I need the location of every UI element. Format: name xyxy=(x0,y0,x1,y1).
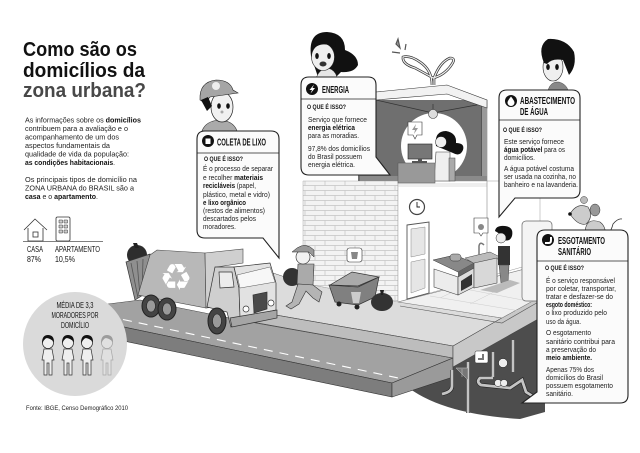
room light circle xyxy=(401,113,467,179)
intro text: qualidade de vida da população: xyxy=(25,152,129,158)
body text: ser usada na cozinha, no xyxy=(504,174,576,181)
title xyxy=(23,39,146,102)
trash bag xyxy=(371,290,393,311)
icon: lamp xyxy=(428,104,438,118)
brick wall xyxy=(303,181,398,302)
panel: energia xyxy=(301,77,390,175)
label: apartamento xyxy=(55,245,100,264)
dumpster xyxy=(329,272,379,310)
body text: para as moradias. xyxy=(308,133,359,140)
icon: house xyxy=(24,219,47,241)
icon: residents xyxy=(42,335,113,375)
housing type stats xyxy=(23,217,103,264)
woman in kitchen xyxy=(480,226,520,293)
label: casa: 87% xyxy=(27,255,41,264)
body text: água potável para os xyxy=(504,147,565,154)
label: average residents xyxy=(52,300,98,330)
road surface xyxy=(100,300,453,383)
stove xyxy=(433,254,474,295)
sink cabinet xyxy=(465,243,502,288)
title: Como são os xyxy=(23,39,137,61)
heading: SANITÁRIO xyxy=(558,245,591,258)
intro text: aspectos fundamentais da xyxy=(25,143,110,150)
woman at desk xyxy=(434,131,463,181)
title: domicílios da xyxy=(23,60,146,82)
white wall xyxy=(398,181,540,302)
body text: 97,8% dos domicílios xyxy=(308,146,370,153)
road dashes xyxy=(123,320,403,379)
body text: por coletar, transportar, xyxy=(546,286,616,293)
body text: recicláveis (papel, xyxy=(203,183,256,190)
body text: Este serviço fornece xyxy=(504,139,564,146)
truck body xyxy=(138,250,206,308)
icon: sparks xyxy=(392,39,406,53)
door xyxy=(407,222,429,299)
recycling symbol: ♻ xyxy=(159,256,193,299)
body text: sanitário. xyxy=(546,391,573,398)
sewage pipes xyxy=(442,340,534,413)
rats in pipes xyxy=(494,358,508,386)
intro text: ZONA URBANA do BRASIL são a xyxy=(25,186,134,192)
label: average residents: MÉDIA DE 3,3 xyxy=(56,300,94,310)
body text: O QUE É ISSO? xyxy=(204,155,243,163)
panel: coleta de lixo xyxy=(197,131,279,258)
panel: average residents circle xyxy=(23,292,127,396)
body text: O esgotamento xyxy=(546,330,591,337)
heading: ESGOTAMENTO xyxy=(558,236,605,247)
icon: trash xyxy=(202,135,214,147)
intro text: as condições habitacionais. xyxy=(25,160,115,167)
body text: A água potável costuma xyxy=(504,166,574,173)
truck cab xyxy=(207,263,277,327)
body text: do Brasil possuem xyxy=(308,154,362,161)
body text: descartados pelos xyxy=(203,216,256,223)
icon: pipe xyxy=(542,234,554,246)
body text: possuem esgotamento xyxy=(546,383,613,390)
icon: bolt xyxy=(306,83,318,95)
icon: energy bubble xyxy=(408,122,422,139)
mouse xyxy=(568,196,622,240)
body text xyxy=(545,264,616,398)
source: Fonte: IBGE, Censo Demográfico 2010 xyxy=(26,406,129,412)
truck hopper xyxy=(126,254,150,300)
body text: esgoto doméstico: xyxy=(546,302,592,309)
body text: O QUE É ISSO? xyxy=(545,264,584,272)
body text: a preservação do xyxy=(546,347,596,354)
intro text: contribuem para a avaliação e o xyxy=(25,126,128,133)
garbage collector xyxy=(283,245,322,309)
body text: (restos de alimentos) xyxy=(203,208,265,215)
character: energy woman xyxy=(311,32,358,78)
body text xyxy=(503,126,578,189)
road front face xyxy=(100,322,392,397)
heading: ENERGIA xyxy=(322,85,349,96)
desk xyxy=(398,163,435,183)
panel: abastecimento de água xyxy=(499,90,580,217)
body text: É o serviço responsável xyxy=(546,276,615,285)
underground cutaway xyxy=(405,310,545,419)
icon: drop xyxy=(505,95,517,107)
label: average residents: DOMICÍLIO xyxy=(61,320,89,330)
body text: o lixo produzido pelo xyxy=(546,310,607,317)
intro text: casa e o apartamento. xyxy=(25,194,98,201)
icon: sewage bubble xyxy=(475,351,488,363)
body text: plástico, metal e vidro) xyxy=(203,192,270,199)
spider web xyxy=(456,368,468,380)
body text: energia elétrica. xyxy=(308,162,355,169)
heading: DE ÁGUA xyxy=(520,105,548,118)
body text: Apenas 75% dos xyxy=(546,367,594,374)
clock xyxy=(410,200,424,214)
plant sprout xyxy=(403,57,454,85)
body text: moradores. xyxy=(203,224,236,231)
body text: e recolher materiais xyxy=(203,175,263,182)
body text: domicílios do Brasil xyxy=(546,375,603,382)
roof xyxy=(376,85,487,108)
body text: banheiro e na lavanderia. xyxy=(504,182,578,189)
body text: sanitário contribui para xyxy=(546,339,615,346)
title: zona urbana? xyxy=(23,80,146,102)
character: water man xyxy=(541,39,575,90)
computer xyxy=(408,144,432,163)
heading xyxy=(520,96,575,118)
heading xyxy=(558,236,605,258)
label: apartamento: 10,5% xyxy=(55,255,75,264)
garbage bag xyxy=(127,243,147,265)
street platform xyxy=(100,272,540,397)
panel: esgotamento sanitário xyxy=(522,230,628,403)
label: casa xyxy=(27,245,43,264)
truck wheels xyxy=(142,295,226,334)
intro text: Os principais tipos de domicílio na xyxy=(25,177,137,184)
body text: energia elétrica xyxy=(308,125,355,132)
intro text: As informações sobre os domicílios xyxy=(25,118,141,124)
label: apartamento: APARTAMENTO xyxy=(55,245,100,254)
character: recycling man xyxy=(200,80,238,131)
label: average residents: MORADORES POR xyxy=(52,310,98,320)
icon: water bubble xyxy=(474,218,488,236)
kitchen floor xyxy=(398,265,540,318)
house xyxy=(303,39,552,323)
body text: O QUE É ISSO? xyxy=(503,126,542,134)
body text: domicílios. xyxy=(504,155,535,162)
icon: apartment xyxy=(56,217,70,241)
sidewalk xyxy=(230,272,502,346)
body text: e lixo orgânico xyxy=(203,200,246,207)
body text: uso da água. xyxy=(546,319,581,326)
body text: Serviço que fornece xyxy=(308,117,367,124)
label: casa: CASA xyxy=(27,245,43,254)
heading: ABASTECIMENTO xyxy=(520,96,575,107)
heading: COLETA DE LIXO xyxy=(217,138,266,148)
body text: O QUE É ISSO? xyxy=(307,103,346,111)
upper room xyxy=(358,100,487,181)
garbage truck xyxy=(126,243,277,334)
body text xyxy=(307,103,370,169)
body text: É o processo de separar xyxy=(203,164,274,173)
intro text: acompanhamento de um dos xyxy=(25,134,120,142)
body text xyxy=(203,155,274,231)
body text: tratar e desfazer-se do xyxy=(546,294,613,301)
fridge xyxy=(522,221,552,301)
icon: trash bubble xyxy=(347,248,362,262)
body text: meio ambiente. xyxy=(546,355,592,362)
intro text xyxy=(25,118,141,201)
